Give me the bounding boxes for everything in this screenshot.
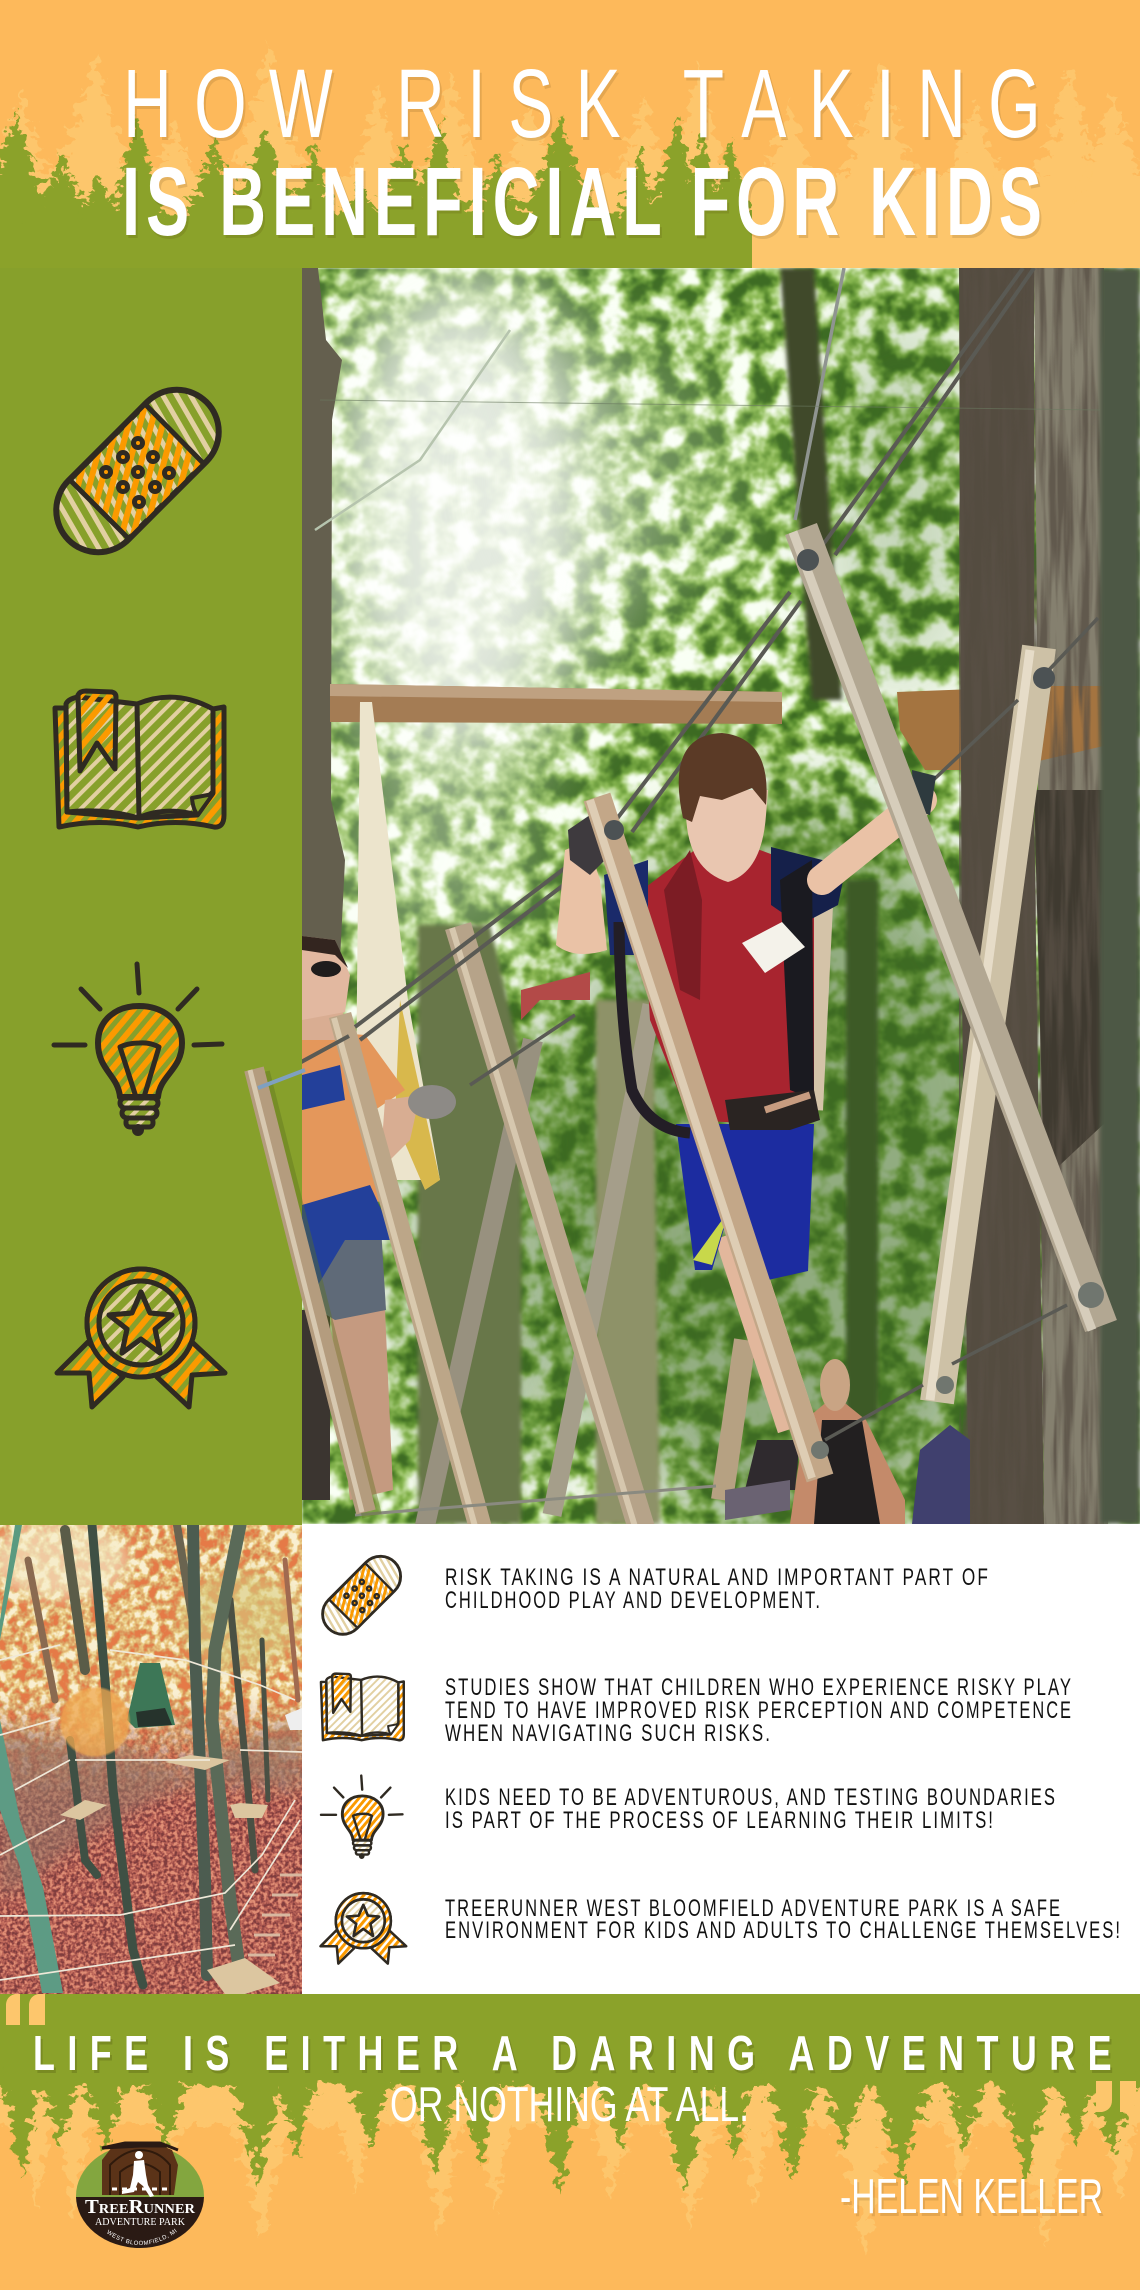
rope ladder bbox=[248, 1875, 302, 1955]
boy bbox=[556, 733, 936, 1520]
lens flare bbox=[59, 1686, 131, 1758]
wood beam bbox=[330, 684, 782, 724]
forest silhouette: green hanging trees bbox=[0, 1980, 1140, 2196]
barn tent bbox=[127, 1663, 175, 1728]
text: fact one: CHILDHOOD PLAY AND DEVELOPMENT. bbox=[445, 1587, 822, 1614]
quotation mark: closing bbox=[1096, 2081, 1136, 2112]
quote text bbox=[33, 2027, 1124, 2132]
text: fact two bbox=[445, 1674, 1073, 1747]
forest silhouette: pale trees bbox=[0, 43, 1140, 285]
panel: facts list bbox=[302, 1525, 1140, 1994]
title bbox=[122, 49, 1063, 256]
panel: green icon column bbox=[0, 268, 302, 1525]
text: fact three bbox=[445, 1784, 1057, 1834]
logo: TreeRunner Adventure Park: ADVENTURE PARK bbox=[95, 2216, 185, 2228]
cables bbox=[257, 268, 1100, 1515]
logo: TreeRunner Adventure Park: TreeRunner bbox=[85, 2196, 196, 2218]
quotation mark: opening bbox=[6, 1994, 45, 2025]
quote text: OR NOTHING AT ALL. bbox=[390, 2078, 749, 2132]
flag and banner bbox=[355, 702, 440, 1180]
forest silhouette: pale hanging trees bbox=[0, 2047, 1140, 2257]
icon: small medal bbox=[320, 1893, 406, 1964]
panel: quote footer bbox=[0, 1994, 1140, 2290]
forest silhouette: green trees bbox=[0, 108, 752, 268]
planks behind bbox=[334, 647, 1039, 1530]
woman spectator bbox=[302, 936, 456, 1500]
text: fact two: WHEN NAVIGATING SUCH RISKS. bbox=[445, 1720, 772, 1747]
fall trunks bbox=[28, 1525, 298, 1985]
icon: bandage bbox=[39, 372, 236, 570]
ropes bbox=[0, 1645, 302, 1980]
icon: light bulb bbox=[54, 964, 222, 1134]
background people bbox=[790, 1395, 905, 1524]
icon: small bulb bbox=[321, 1776, 402, 1858]
text: fact four bbox=[445, 1895, 1122, 1944]
logo: TreeRunner Adventure Park bbox=[76, 2142, 204, 2248]
icon: medal with star bbox=[57, 1269, 225, 1407]
logo: TreeRunner Adventure Park: WEST BLOOMFIELD, MI bbox=[107, 2228, 177, 2245]
icon: open book bbox=[55, 691, 224, 827]
panel: top banner bbox=[0, 0, 1140, 285]
text: fact one bbox=[445, 1564, 990, 1614]
photo: boy crossing rope course bbox=[250, 260, 1140, 1560]
icon: small bandage bbox=[314, 1548, 409, 1643]
photo: autumn rope course bbox=[0, 1520, 302, 1994]
icon: small book bbox=[321, 1674, 404, 1740]
plank overhanging green panel bbox=[250, 1069, 372, 1516]
tree trunks bbox=[302, 268, 1140, 1524]
platforms bbox=[60, 1708, 302, 1994]
plank in front of boy bbox=[590, 529, 1104, 1478]
